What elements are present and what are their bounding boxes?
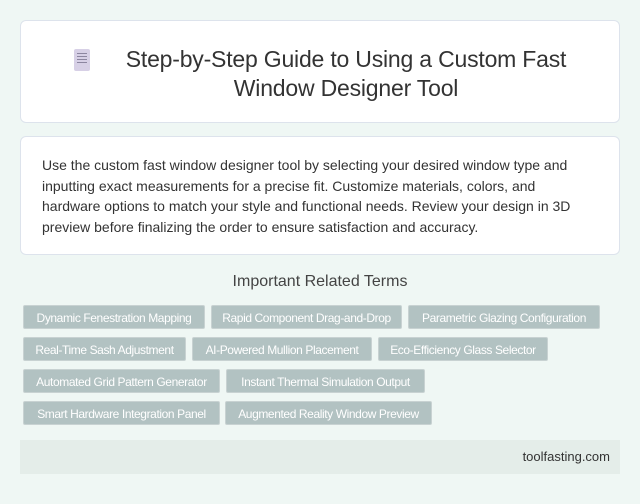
tags: Rapid Component Drag-and-Drop — [222, 311, 391, 325]
tags: Eco-Efficiency Glass Selector — [390, 343, 536, 357]
tags: Real-Time Sash Adjustment — [35, 343, 174, 357]
tags: Augmented Reality Window Preview — [238, 407, 419, 421]
tags: Instant Thermal Simulation Output — [241, 375, 410, 389]
panel: description — [20, 136, 620, 255]
footer text: toolfasting.com — [523, 449, 610, 464]
panel: title card — [20, 20, 620, 123]
tags: AI-Powered Mullion Placement — [206, 343, 358, 357]
title: Step-by-Step Guide to Using a Custom Fast Window Designer Tool — [126, 46, 566, 101]
description text: Use the custom fast window designer tool by selecting your desired window type and inputting exact measurements for a precise fit. Customize materials, colors, and hardware options to match your style and functional needs. Review your design in 3D preview before finalizing the order to ensure satisfaction and accuracy. — [42, 157, 570, 234]
icon: document — [74, 49, 90, 71]
footer — [20, 440, 620, 474]
tags: Dynamic Fenestration Mapping — [37, 311, 191, 325]
heading: related terms: Important Related Terms — [233, 273, 407, 290]
tags: Parametric Glazing Configuration — [422, 311, 586, 325]
tags: Smart Hardware Integration Panel — [37, 407, 206, 421]
tags: Automated Grid Pattern Generator — [36, 375, 207, 389]
